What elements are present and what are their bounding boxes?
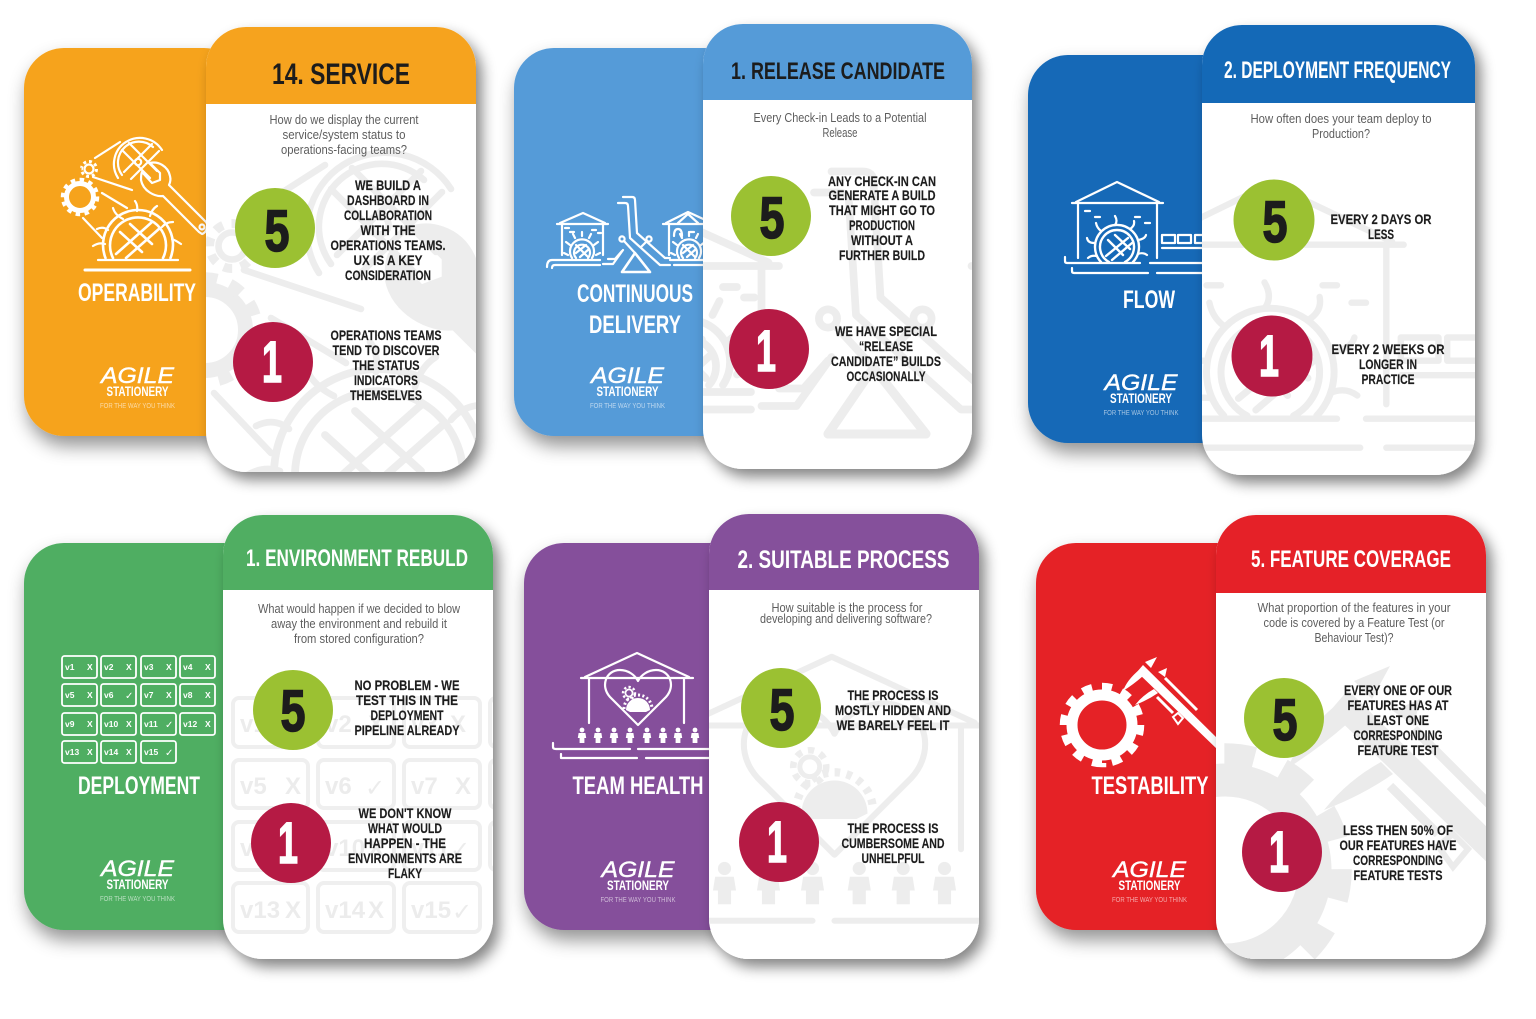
card set: continuous delivery — [504, 22, 988, 487]
score badge 1: 1 — [756, 319, 776, 384]
front card — [206, 27, 476, 472]
watermark icon — [206, 150, 476, 472]
watermark icon: v6 — [325, 773, 352, 800]
answer for 1: THE STATUS — [352, 357, 420, 373]
answer for 1: PRACTICE — [1362, 371, 1414, 387]
category label: TEAM HEALTH — [572, 772, 704, 800]
icon: version boxes grid: ✓ — [165, 748, 173, 759]
score badge 5 — [253, 670, 333, 750]
question: away the environment and rebuild it — [271, 617, 447, 631]
answer for 1: LONGER IN — [1359, 356, 1417, 372]
category label: DELIVERY — [589, 311, 681, 339]
front card — [223, 515, 493, 959]
score badge 5: 5 — [760, 186, 784, 251]
question: Production? — [1312, 127, 1370, 141]
icon: version boxes grid: v1 — [65, 662, 75, 672]
logo — [599, 857, 676, 904]
logo: FOR THE WAY YOU THINK — [600, 895, 676, 904]
question — [258, 602, 461, 646]
watermark icon: v3 — [411, 711, 438, 738]
back card: testability — [1036, 543, 1266, 930]
answer for 5: LESS — [1368, 226, 1394, 242]
answer for 1: FLAKY — [388, 865, 422, 881]
logo: STATIONERY — [106, 876, 169, 892]
icon: version boxes grid: X — [126, 747, 132, 757]
watermark icon: ✓ — [450, 836, 470, 864]
card header — [703, 24, 972, 100]
score badge 5 — [731, 176, 811, 256]
icon: house, heart and people — [553, 653, 712, 758]
answer for 5: WE BUILD A — [355, 177, 421, 193]
answer for 1 — [348, 805, 462, 881]
answer for 1: OCCASIONALLY — [846, 368, 926, 384]
answer for 1 — [1340, 822, 1456, 883]
icon: version boxes grid: v11 — [144, 719, 158, 729]
logo — [99, 856, 175, 903]
logo — [1111, 857, 1187, 904]
icon: version boxes grid: X — [87, 690, 93, 700]
back card: continuous delivery — [514, 48, 744, 436]
card header — [1216, 515, 1486, 593]
answer for 1: TEND TO DISCOVER — [332, 342, 440, 358]
answer for 5: FURTHER BUILD — [839, 247, 925, 263]
answer for 1 — [842, 820, 944, 866]
watermark icon: v2 — [325, 711, 352, 738]
score badge 1: 1 — [1259, 324, 1279, 389]
front card — [703, 24, 972, 469]
answer for 1: WE DON'T KNOW — [358, 805, 452, 821]
answer for 5: FEATURE TEST — [1358, 742, 1439, 758]
card header — [1202, 25, 1475, 103]
answer for 1: CUMBERSOME AND — [842, 835, 944, 851]
logo: FOR THE WAY YOU THINK — [100, 401, 175, 410]
score badge 5 — [1234, 180, 1314, 260]
answer for 5: THE PROCESS IS — [848, 687, 938, 703]
back card: flow — [1028, 55, 1258, 443]
icon: version boxes grid: v2 — [104, 662, 114, 672]
icon: gears, wheel and wrench — [63, 138, 207, 270]
answer for 1 — [330, 327, 442, 403]
icon: version boxes grid: X — [87, 662, 93, 672]
card header — [223, 515, 493, 590]
watermark icon: v11 — [411, 835, 450, 862]
answer for 5 — [1330, 211, 1432, 242]
watermark icon: X — [368, 897, 384, 924]
answer for 5: CONSIDERATION — [345, 267, 431, 283]
watermark icon: X — [285, 711, 301, 738]
answer for 1: “RELEASE — [859, 338, 913, 354]
back card: operability — [24, 48, 244, 436]
score badge 5: 5 — [770, 678, 794, 743]
answer for 5 — [835, 687, 951, 733]
icon: version boxes grid: X — [166, 662, 172, 672]
logo: FOR THE WAY YOU THINK — [100, 894, 175, 903]
card header — [206, 27, 476, 104]
card title: 1. ENVIRONMENT REBULD — [246, 545, 468, 572]
watermark icon — [709, 654, 979, 959]
icon: version boxes grid: X — [87, 719, 93, 729]
logo: STATIONERY — [596, 383, 659, 399]
question — [270, 113, 419, 157]
icon: version boxes grid: X — [126, 719, 132, 729]
answer for 5: WITHOUT A — [851, 232, 913, 248]
icon: version boxes grid: X — [205, 719, 211, 729]
card title: 1. RELEASE CANDIDATE — [731, 58, 945, 85]
logo: FOR THE WAY YOU THINK — [590, 401, 665, 410]
watermark icon: v5 — [240, 773, 267, 800]
card set: testability — [1036, 515, 1536, 984]
score badge 5: 5 — [280, 679, 306, 744]
answer for 1: WHAT WOULD — [368, 820, 442, 836]
answer for 5: GENERATE A BUILD — [828, 187, 936, 203]
icon: version boxes grid: v12 — [183, 719, 197, 729]
answer for 5: DEPLOYMENT — [370, 707, 444, 723]
question: operations-facing teams? — [281, 143, 407, 157]
icon: version boxes grid: v8 — [183, 690, 193, 700]
logo: STATIONERY — [106, 383, 169, 399]
score badge 1: 1 — [262, 330, 282, 395]
card set: flow — [1028, 25, 1536, 475]
watermark icon: v10 — [325, 835, 365, 862]
watermark icon: X — [285, 835, 301, 862]
watermark icon: X — [455, 773, 471, 800]
question: from stored configuration? — [294, 632, 424, 646]
card title: 14. SERVICE — [272, 58, 410, 91]
score badge 1 — [233, 322, 313, 402]
question: developing and delivering software? — [760, 612, 932, 626]
question — [1258, 601, 1450, 645]
answer for 1: FEATURE TESTS — [1354, 867, 1442, 883]
answer for 5: PIPELINE ALREADY — [354, 722, 460, 738]
watermark icon — [1202, 194, 1475, 451]
logo — [1102, 370, 1178, 417]
answer for 5 — [828, 173, 936, 263]
icon: version boxes grid: v15 — [144, 747, 158, 757]
watermark icon: X — [285, 897, 301, 924]
category label: FLOW — [1123, 286, 1175, 314]
icon: version boxes grid: v10 — [104, 719, 118, 729]
answer for 5: TEST THIS IN THE — [356, 692, 458, 708]
score badge 1: 1 — [1269, 820, 1289, 885]
answer for 5: COLLABORATION — [344, 207, 432, 223]
watermark icon: v15 — [411, 897, 451, 924]
category label: CONTINUOUS — [577, 280, 693, 308]
answer for 5: FEATURES HAS AT — [1348, 697, 1449, 713]
watermark icon: v1 — [240, 711, 267, 738]
icon: version boxes grid: X — [205, 662, 211, 672]
logo: AGILE — [99, 856, 174, 881]
logo: AGILE — [589, 363, 664, 388]
watermark icon — [1216, 666, 1486, 959]
watermark icon: v13 — [240, 897, 280, 924]
icon: version boxes grid: v14 — [104, 747, 118, 757]
icon: mill and conveyor — [1065, 182, 1215, 273]
icon: version boxes grid: v6 — [104, 690, 114, 700]
question: Every Check-in Leads to a Potential — [754, 111, 926, 125]
answer for 5: LEAST ONE — [1367, 712, 1429, 728]
answer for 1: HAPPEN - THE — [364, 835, 446, 851]
answer for 1: EVERY 2 WEEKS OR — [1332, 341, 1444, 357]
logo: AGILE — [599, 857, 675, 882]
logo: STATIONERY — [1118, 877, 1181, 893]
answer for 1 — [1332, 341, 1444, 387]
icon: version boxes grid: X — [126, 662, 132, 672]
watermark icon: X — [285, 773, 301, 800]
answer for 5: CORRESPONDING — [1354, 727, 1443, 743]
score badge 5: 5 — [1262, 190, 1288, 255]
answer for 5: EVERY 2 DAYS OR — [1330, 211, 1432, 227]
logo: STATIONERY — [607, 877, 669, 893]
question: How suitable is the process for — [772, 601, 922, 615]
watermark icon: ✓ — [452, 898, 472, 926]
icon: version boxes grid: ✓ — [165, 720, 173, 731]
icon: version boxes grid: ✓ — [125, 691, 133, 702]
back card: deployment — [24, 543, 264, 930]
answer for 5: NO PROBLEM - WE — [354, 677, 460, 693]
watermark icon: X — [368, 835, 384, 862]
question: What proportion of the features in your — [1258, 601, 1450, 615]
score badge 1 — [1232, 316, 1312, 396]
icon: pipeline between two mills — [547, 197, 716, 272]
question: How often does your team deploy to — [1250, 112, 1432, 126]
score badge 1: 1 — [278, 811, 298, 876]
watermark icon: v7 — [411, 773, 438, 800]
answer for 5: WE BARELY FEEL IT — [836, 717, 950, 733]
question: code is covered by a Feature Test (or — [1264, 616, 1444, 630]
answer for 1: OPERATIONS TEAMS — [330, 327, 442, 343]
category label: OPERABILITY — [78, 279, 196, 307]
score badge 1 — [739, 802, 819, 882]
icon: version boxes grid: v4 — [183, 662, 193, 672]
icon: version boxes grid: v7 — [144, 690, 154, 700]
answer for 5: THAT MIGHT GO TO — [829, 202, 935, 218]
answer for 5: ANY CHECK-IN CAN — [828, 173, 936, 189]
logo: AGILE — [1111, 857, 1186, 882]
answer for 5: EVERY ONE OF OUR — [1344, 682, 1452, 698]
answer for 5: OPERATIONS TEAMS. — [330, 237, 446, 253]
logo: FOR THE WAY YOU THINK — [1104, 408, 1178, 417]
question — [760, 601, 932, 626]
card set: team health — [524, 514, 1038, 960]
answer for 1: UNHELPFUL — [862, 850, 925, 866]
score badge 5: 5 — [264, 199, 290, 264]
answer for 1: LESS THEN 50% OF — [1343, 822, 1453, 838]
card title: 5. FEATURE COVERAGE — [1251, 546, 1451, 573]
logo: AGILE — [99, 363, 174, 388]
answer for 1: ENVIRONMENTS ARE — [348, 850, 462, 866]
answer for 5: WITH THE — [360, 222, 416, 238]
front card — [1216, 515, 1486, 959]
score badge 5 — [235, 188, 315, 268]
score badge 5 — [741, 668, 821, 748]
answer for 1: THEMSELVES — [350, 387, 422, 403]
category label — [577, 280, 693, 339]
icon: version boxes grid: v9 — [65, 719, 75, 729]
score badge 5: 5 — [1272, 688, 1298, 753]
watermark icon — [231, 696, 493, 934]
answer for 5: PRODUCTION — [849, 217, 915, 233]
answer for 5: DASHBOARD IN — [347, 192, 429, 208]
answer for 1: OUR FEATURES HAVE — [1340, 837, 1456, 853]
question — [1250, 112, 1432, 141]
card set: operability — [14, 25, 492, 490]
front card — [1202, 25, 1475, 475]
logo — [589, 363, 665, 410]
watermark icon: v9 — [240, 835, 267, 862]
score badge 1 — [729, 309, 809, 389]
logo: STATIONERY — [1110, 390, 1172, 406]
icon: version boxes grid: X — [166, 690, 172, 700]
score badge 1 — [1242, 812, 1322, 892]
answer for 1: CANDIDATE” BUILDS — [831, 353, 941, 369]
front card — [709, 514, 979, 959]
answer for 1: INDICATORS — [354, 372, 418, 388]
question — [754, 111, 926, 140]
icon: version boxes grid — [62, 656, 215, 763]
card header — [709, 514, 979, 590]
answer for 1: THE PROCESS IS — [848, 820, 938, 836]
card title: 2. SUITABLE PROCESS — [738, 546, 950, 574]
answer for 5: UX IS A KEY — [354, 252, 423, 268]
answer for 1 — [831, 323, 941, 384]
question: service/system status to — [282, 128, 406, 142]
score badge 1 — [251, 803, 331, 883]
card set: deployment — [24, 515, 566, 959]
category label: TESTABILITY — [1092, 772, 1209, 800]
answer for 5: MOSTLY HIDDEN AND — [835, 702, 951, 718]
icon: version boxes grid: X — [87, 747, 93, 757]
question: What would happen if we decided to blow — [258, 602, 461, 616]
watermark icon — [703, 168, 972, 438]
question: Release — [822, 126, 858, 140]
logo: AGILE — [1102, 370, 1178, 395]
watermark icon: ✓ — [365, 774, 385, 802]
question: Behaviour Test)? — [1314, 631, 1394, 645]
icon: version boxes grid: v5 — [65, 690, 75, 700]
watermark icon: X — [450, 711, 466, 738]
answer for 5 — [330, 177, 446, 283]
score badge 5 — [1244, 678, 1324, 758]
icon: version boxes grid: v3 — [144, 662, 154, 672]
category label: DEPLOYMENT — [78, 772, 200, 800]
icon: gear and caliper — [1064, 657, 1218, 763]
icon: version boxes grid: v13 — [65, 747, 79, 757]
question: How do we display the current — [270, 113, 419, 127]
watermark icon: X — [368, 711, 384, 738]
answer for 1: CORRESPONDING — [1353, 852, 1443, 868]
answer for 1: WE HAVE SPECIAL — [835, 323, 937, 339]
score badge 1: 1 — [767, 810, 787, 875]
answer for 5 — [354, 677, 460, 738]
back card: team health — [524, 543, 754, 930]
watermark icon: v14 — [325, 897, 366, 924]
icon: version boxes grid: X — [205, 690, 211, 700]
logo: FOR THE WAY YOU THINK — [1112, 895, 1187, 904]
logo — [99, 363, 175, 410]
answer for 5 — [1344, 682, 1452, 758]
